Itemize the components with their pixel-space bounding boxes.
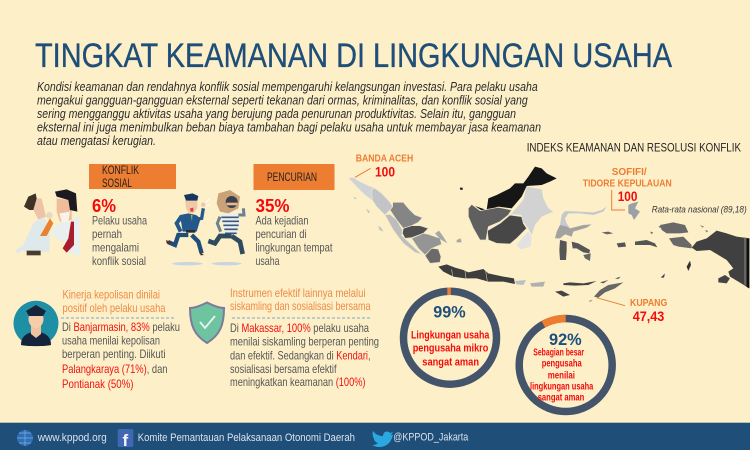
donut: 99%: pengusaha mikro — [413, 343, 489, 355]
donut: 92%: 92% — [549, 330, 582, 349]
description: konflik sosial: mengalami — [92, 240, 139, 254]
intro paragraph: sering mengganggu aktivitas usaha yang berujung pada penurunan produktivitas. Selain itu, gangguan — [37, 107, 516, 121]
donut: 99% — [404, 288, 496, 384]
heading: instrumen efektif: siskamling dan sosialisasi bersama — [230, 299, 371, 313]
body text: instrumen efektif: dan efektif. Sedangkan di Kendari, — [230, 348, 370, 362]
website: www.kppod.org — [37, 432, 107, 444]
stat: 35%: 35% — [256, 196, 290, 216]
heading: instrumen efektif — [230, 286, 371, 313]
panel: kinerja kepolisian — [14, 288, 180, 391]
donut: 99%: sangat aman — [422, 357, 479, 369]
description: konflik sosial: konflik sosial — [92, 254, 146, 268]
panel: konflik sosial — [15, 164, 176, 268]
body text: instrumen efektif: meningkatkan keamanan (100%) — [230, 375, 366, 389]
body text: kinerja kepolisian: berperan penting. Diikuti — [62, 347, 166, 361]
callout: Sofifi / Tidore Kepulauan: SOFIFI/ — [612, 166, 647, 178]
description: konflik sosial — [92, 214, 147, 268]
body text: kinerja kepolisian: Di Banjarmasin, 83% pelaku — [62, 320, 180, 334]
intro paragraph: mengakui gangguan-gangguan eksternal seperti tekanan dari ormas, kriminalitas, dan konflik sosial yang — [37, 94, 528, 108]
intro paragraph: eksternal ini juga menimbulkan beban biaya tambahan bagi pelaku usaha untuk membayar jasa keamanan — [37, 120, 541, 134]
body text: instrumen efektif: menilai siskamling berperan penting — [230, 335, 379, 349]
description: pencurian: usaha — [256, 254, 280, 268]
body text: instrumen efektif — [230, 321, 379, 389]
icon: police officer — [14, 301, 58, 346]
map: Kalimantan — [468, 167, 557, 249]
map of Indonesia — [348, 167, 749, 302]
description: pencurian: pencurian di — [256, 227, 306, 241]
description: konflik sosial: pernah — [92, 227, 122, 241]
label box: konflik sosial — [89, 164, 176, 190]
heading: instrumen efektif: Instrumen efektif lainnya melalui — [230, 286, 366, 300]
body text: kinerja kepolisian: usaha menilai kepolisan — [62, 333, 160, 347]
callout: Sofifi / Tidore Kepulauan: TIDORE KEPULAUAN — [583, 178, 672, 190]
map: eastern Indonesia — [555, 202, 749, 302]
donut: 92%: menilai — [548, 370, 575, 381]
description: pencurian: lingkungan tempat — [256, 240, 333, 254]
callout: Kupang — [597, 297, 667, 324]
body text: instrumen efektif: sosialisasi bersama efektif — [230, 362, 337, 376]
donut: 99%: 99% — [433, 303, 466, 322]
label box: konflik sosial: SOSIAL — [102, 178, 132, 190]
icon: two men fighting — [15, 189, 80, 256]
heading: kinerja kepolisian — [62, 288, 166, 315]
icon: facebook: f — [122, 431, 128, 450]
icon: globe — [17, 430, 33, 446]
description: konflik sosial: Pelaku usaha — [92, 214, 147, 228]
donut: 92%: pengusaha — [542, 359, 582, 370]
description: pencurian: Ada kejadian — [256, 214, 308, 228]
twitter handle: @KPPOD_Jakarta — [393, 432, 469, 444]
body text: instrumen efektif: Di Makassar, 100% pelaku usaha — [230, 321, 369, 335]
icon: police chasing thief — [166, 190, 244, 265]
heading: kinerja kepolisian: positif oleh pelaku usaha — [62, 301, 166, 315]
map: Java and Nusa Tenggara west — [438, 264, 545, 287]
organisation name: Komite Pemantauan Pelaksanaan Otonomi Daerah — [138, 432, 355, 444]
label box: pencurian: PENCURIAN — [267, 172, 317, 184]
icon: twitter — [372, 431, 393, 447]
stat: 6%: 6% — [92, 196, 116, 216]
icon: shield — [190, 302, 224, 343]
body text: kinerja kepolisian: Pontianak (50%) — [62, 377, 134, 391]
label box: konflik sosial: KONFLIK — [102, 165, 139, 177]
callout: Banda Aceh — [355, 153, 413, 180]
callout: Banda Aceh: 100 — [375, 164, 395, 180]
panel: instrumen efektif — [190, 286, 379, 389]
intro paragraph — [37, 80, 541, 148]
callout: Sofifi / Tidore Kepulauan: 100 — [618, 188, 638, 204]
donut: 92%: Sebagian besar — [533, 348, 584, 359]
donut: 92%: sangat aman — [538, 393, 584, 404]
body text: kinerja kepolisian: Palangkaraya (71%), dan — [62, 362, 167, 376]
label box: pencurian — [254, 164, 334, 190]
panel: pencurian — [166, 164, 334, 268]
icon: facebook — [118, 429, 133, 450]
body text: kinerja kepolisian — [62, 320, 180, 391]
donut: 92% — [519, 318, 612, 412]
donut: 92%: lingkungan usaha — [530, 381, 594, 392]
footer bar — [0, 423, 750, 450]
callout: Kupang: KUPANG — [630, 297, 667, 309]
intro paragraph: Kondisi keamanan dan rendahnya konflik sosial mempengaruhi kelangsungan investasi. Para pelaku usaha — [37, 80, 538, 94]
callout: Sofifi / Tidore Kepulauan — [583, 166, 672, 210]
map: Sumatra — [348, 178, 463, 263]
callout: Banda Aceh: BANDA ACEH — [356, 153, 413, 165]
description: pencurian — [256, 214, 333, 268]
callout: Kupang: 47,43 — [633, 308, 664, 324]
donut: 99%: Lingkungan usaha — [411, 329, 490, 341]
heading: kinerja kepolisian: Kinerja kepolisan dinilai — [62, 288, 160, 302]
intro paragraph: atau mengatasi kerugian. — [37, 134, 156, 148]
